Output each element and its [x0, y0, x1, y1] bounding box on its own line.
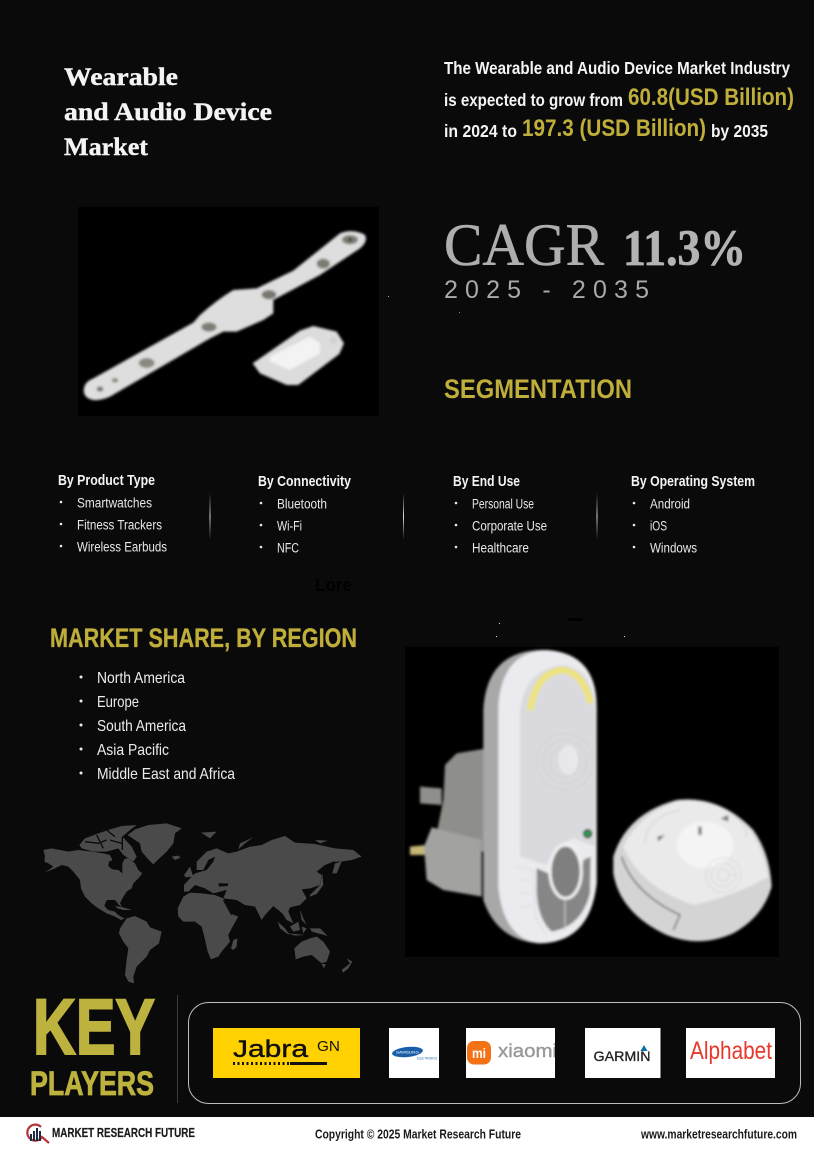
region list: South America: [97, 718, 186, 735]
market growth statement: by 2035: [711, 121, 768, 141]
market growth statement: in 2024 to: [444, 121, 517, 141]
logo: Garmin: GARMIN: [594, 1048, 650, 1064]
monitor rim: [483, 650, 597, 943]
column: by connectivity: Bluetooth: [277, 496, 327, 512]
column: by end use: By End Use: [453, 473, 520, 490]
key players heading: KEY: [33, 982, 155, 1071]
market growth statement: is expected to grow from: [444, 90, 623, 110]
column: by operating system: By Operating System: [631, 473, 755, 490]
logo: Jabra: Jabra: [233, 1036, 309, 1063]
image: baby monitor units: [405, 647, 779, 957]
column: by product type: By Product Type: [58, 472, 155, 489]
logo: Jabra: GN: [317, 1038, 340, 1055]
column: by operating system: iOS: [650, 518, 667, 534]
footer bar: MARKET RESEARCH FUTURE: [52, 1126, 195, 1140]
title: [64, 64, 272, 161]
plug: [437, 748, 487, 853]
column: by product type: Fitness Trackers: [77, 518, 162, 532]
world map: [43, 823, 362, 983]
logo: Xiaomi: [466, 1028, 557, 1078]
hidden placeholder word: Lore: [315, 575, 352, 595]
CAGR headline: 2025 - 2035: [444, 276, 649, 304]
column: by connectivity: Wi-Fi: [277, 518, 302, 534]
key players heading: [30, 982, 155, 1103]
round parent unit: [613, 799, 772, 941]
column: by operating system: Android: [650, 496, 690, 512]
logo: Alphabet: [686, 1028, 775, 1078]
market growth statement: [444, 58, 794, 142]
logo: Alphabet: Alphabet: [690, 1037, 772, 1065]
key players panel: [188, 1002, 800, 1104]
column: by product type: Wireless Earbuds: [77, 540, 167, 554]
map: americas: [43, 823, 182, 983]
logo: Samsung: [389, 1028, 439, 1078]
column: by connectivity: [258, 473, 352, 556]
logo: Samsung: ELECTRONICS: [417, 1056, 438, 1060]
market growth statement: 197.3 (USD Billion): [522, 115, 706, 142]
region list: Asia Pacific: [97, 742, 169, 759]
column: by end use: Personal Use: [472, 496, 534, 512]
logo: Xiaomi: mi: [472, 1045, 486, 1061]
CAGR headline: [444, 212, 746, 304]
region list: [80, 670, 235, 783]
footer bar: Copyright © 2025 Market Research Future: [315, 1126, 521, 1142]
footer logo icon: [27, 1125, 49, 1143]
title: and Audio Device: [64, 99, 272, 126]
column: by product type: Smartwatches: [77, 496, 152, 510]
CAGR headline: 11.3%: [623, 221, 746, 277]
column: by end use: Corporate Use: [472, 518, 547, 534]
region list: Europe: [97, 694, 139, 711]
region list: North America: [97, 670, 185, 687]
CAGR headline: CAGR: [444, 212, 604, 278]
region list: Middle East and Africa: [97, 766, 235, 783]
column: by connectivity: By Connectivity: [258, 473, 352, 490]
logo: Samsung: SAMSUNG: [396, 1050, 419, 1054]
column: by end use: Healthcare: [472, 540, 529, 556]
map: eurasia africa oceania: [178, 832, 362, 973]
footer bar: [0, 1117, 814, 1150]
column: by connectivity: NFC: [277, 540, 299, 556]
logo: Jabra: [213, 1028, 360, 1078]
column: by operating system: Windows: [650, 540, 697, 556]
title: Market: [64, 134, 149, 161]
image: wearable strap and clip: [78, 207, 379, 416]
market share heading: MARKET SHARE, BY REGION: [50, 623, 357, 653]
logo: Garmin: [585, 1028, 660, 1078]
logo: Xiaomi: xiaomi: [498, 1041, 557, 1061]
column: by end use: [453, 473, 547, 556]
segmentation heading: SEGMENTATION: [444, 374, 632, 404]
column: by product type: [58, 472, 167, 554]
key players heading: PLAYERS: [30, 1065, 154, 1103]
title: Wearable: [64, 64, 178, 91]
column: by operating system: [631, 473, 755, 556]
